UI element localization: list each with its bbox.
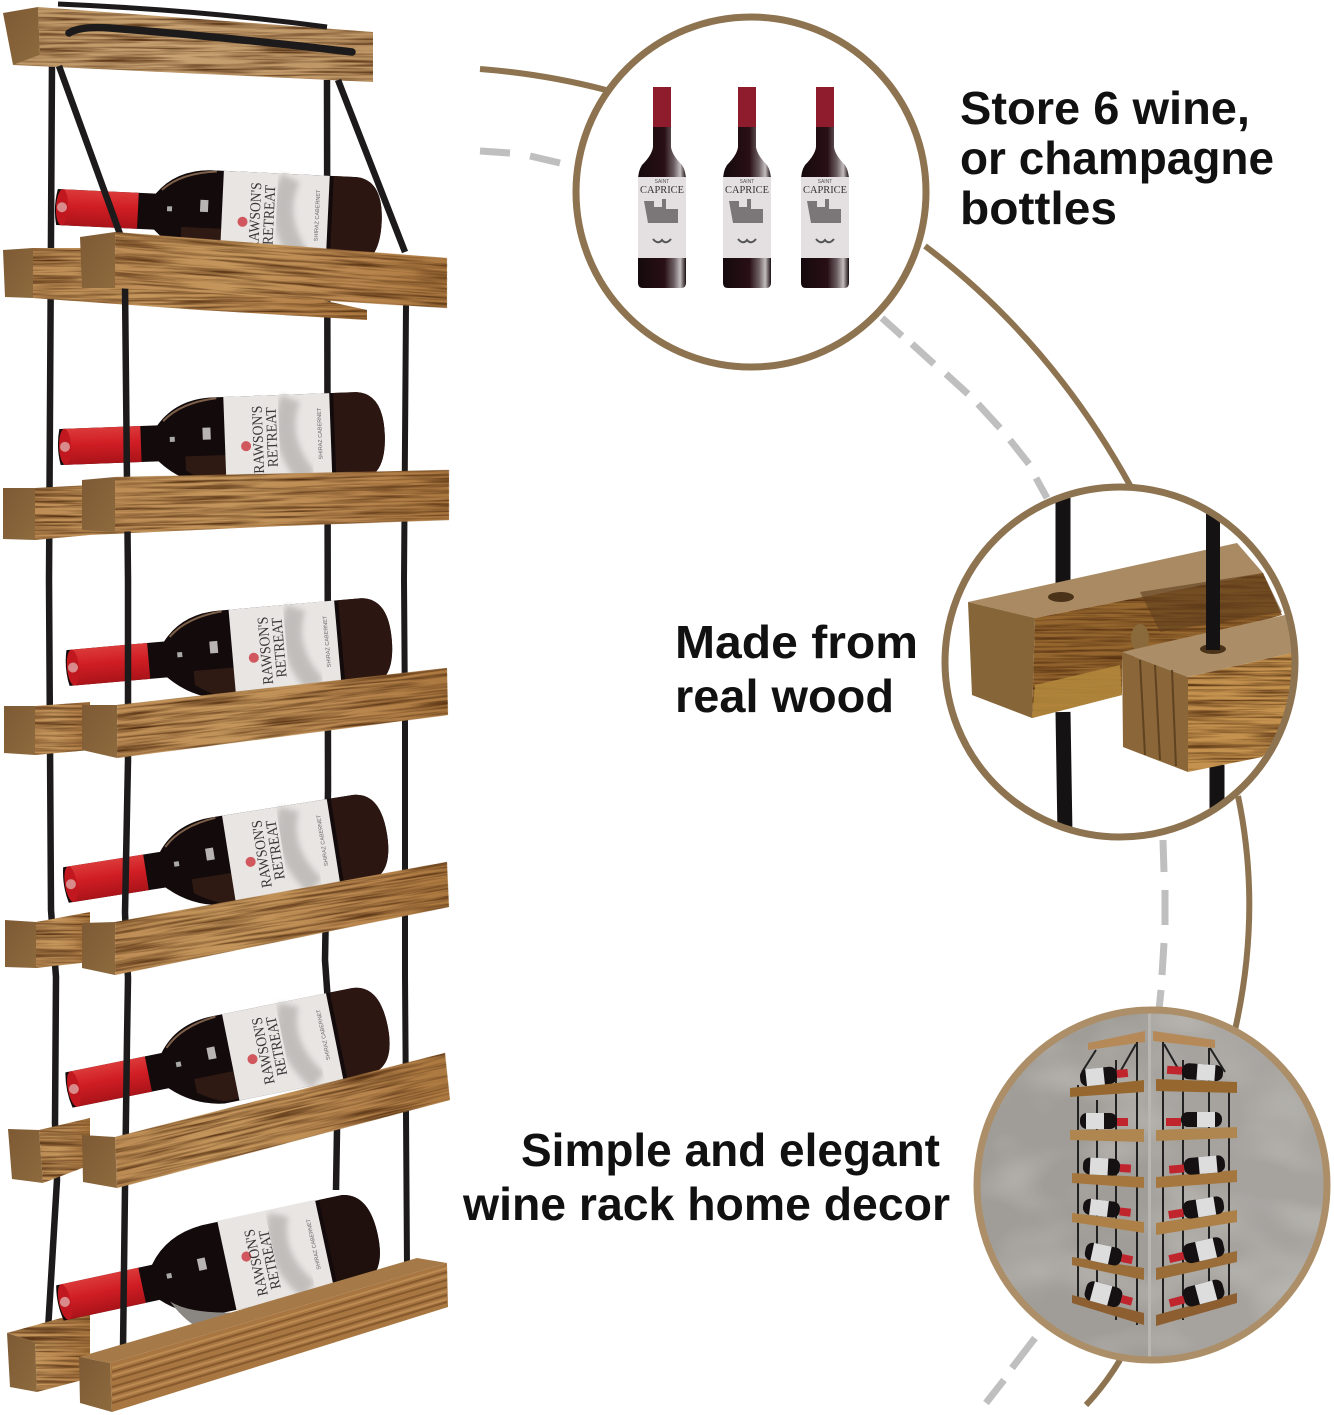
- front ropes: [59, 66, 407, 1350]
- front plank shelf 3: [82, 631, 458, 795]
- bottle 4: SHIRAZ CABERNET: [316, 814, 330, 866]
- text: decor: [462, 1124, 950, 1230]
- front plank shelf 1: [80, 209, 452, 331]
- text: decor: wine rack home decor: [462, 1178, 950, 1230]
- back plank shelf 1: [3, 248, 367, 320]
- callout circle: real wood closeup: [945, 487, 1296, 837]
- mini rack left: [1070, 1031, 1145, 1325]
- bottle 1: [53, 163, 384, 266]
- bottle icon left: SAINT: [655, 179, 669, 185]
- bottle icon right: CAPRICE: [803, 184, 847, 196]
- back plank shelf 2: [3, 485, 367, 540]
- bottle 6: SHIRAZ CABERNET: [306, 1218, 323, 1270]
- bottle 5: [58, 983, 396, 1134]
- text: material: real wood: [675, 670, 894, 722]
- bottle icon middle: SAINT: [740, 179, 754, 185]
- text: decor: Simple and elegant: [521, 1124, 940, 1176]
- back plank shelf 6: [7, 1310, 90, 1392]
- bottle 4: RETREAT: [263, 819, 289, 881]
- callout circle: three bottles: [576, 17, 926, 367]
- bottle 1: SHIRAZ CABERNET: [314, 189, 322, 241]
- text: capacity: or champagne: [960, 132, 1274, 184]
- bottle 2: [56, 391, 386, 491]
- product photo: wine rack: [3, 4, 480, 1412]
- bottle 3: [62, 596, 396, 712]
- bottle 2: SHIRAZ CABERNET: [317, 407, 325, 460]
- back plank shelf 5: [8, 1118, 90, 1183]
- bottle 4: [57, 791, 394, 929]
- bottle 4: RAWSON'S: [249, 819, 276, 889]
- front plank shelf 2: [82, 461, 451, 541]
- bottle 3: RAWSON'S: [255, 616, 277, 685]
- connector: solid brown line: [480, 69, 1249, 1405]
- back plank shelf 4: [5, 912, 90, 968]
- bottle 2: RAWSON'S: [250, 405, 268, 474]
- bottle 6: [48, 1188, 389, 1354]
- text: capacity: [960, 82, 1274, 234]
- text: capacity: Store 6 wine,: [960, 82, 1250, 134]
- bottle 2: RETREAT: [264, 407, 282, 467]
- bottle icon left: CAPRICE: [640, 184, 684, 196]
- bottle 3: RETREAT: [269, 617, 291, 678]
- top board: [3, 4, 373, 82]
- front plank shelf 4: [82, 810, 466, 1027]
- bottle icon right: [801, 87, 849, 288]
- mini rack right: [1153, 1031, 1237, 1326]
- bottle icon right: SAINT: [818, 179, 832, 185]
- front plank shelf 5: [82, 980, 480, 1261]
- bottle icon middle: CAPRICE: [725, 184, 769, 196]
- bottle icon left: [638, 87, 686, 288]
- bottle icon middle: [723, 87, 771, 288]
- bottle 6: RETREAT: [256, 1229, 285, 1291]
- upper right hanging strap: [338, 80, 405, 252]
- front plank shelf 6: [79, 1258, 448, 1412]
- text: capacity: bottles: [960, 182, 1117, 234]
- bottle 1: RAWSON'S: [246, 182, 265, 251]
- bottle 5: RAWSON'S: [250, 1016, 279, 1086]
- bottle 5: RETREAT: [264, 1015, 291, 1077]
- bottle 5: SHIRAZ CABERNET: [316, 1008, 332, 1061]
- connector: dashed grey line: [480, 151, 1165, 1403]
- back ropes: [48, 62, 337, 1330]
- bottle 3: SHIRAZ CABERNET: [322, 615, 333, 667]
- text: material: [675, 616, 918, 722]
- text: material: Made from: [675, 616, 918, 668]
- bottle 6: RAWSON'S: [242, 1228, 272, 1297]
- callout circle: room corner installation: [970, 1000, 1334, 1370]
- back plank shelf 3: [4, 702, 90, 755]
- bottle 1: RETREAT: [260, 185, 279, 245]
